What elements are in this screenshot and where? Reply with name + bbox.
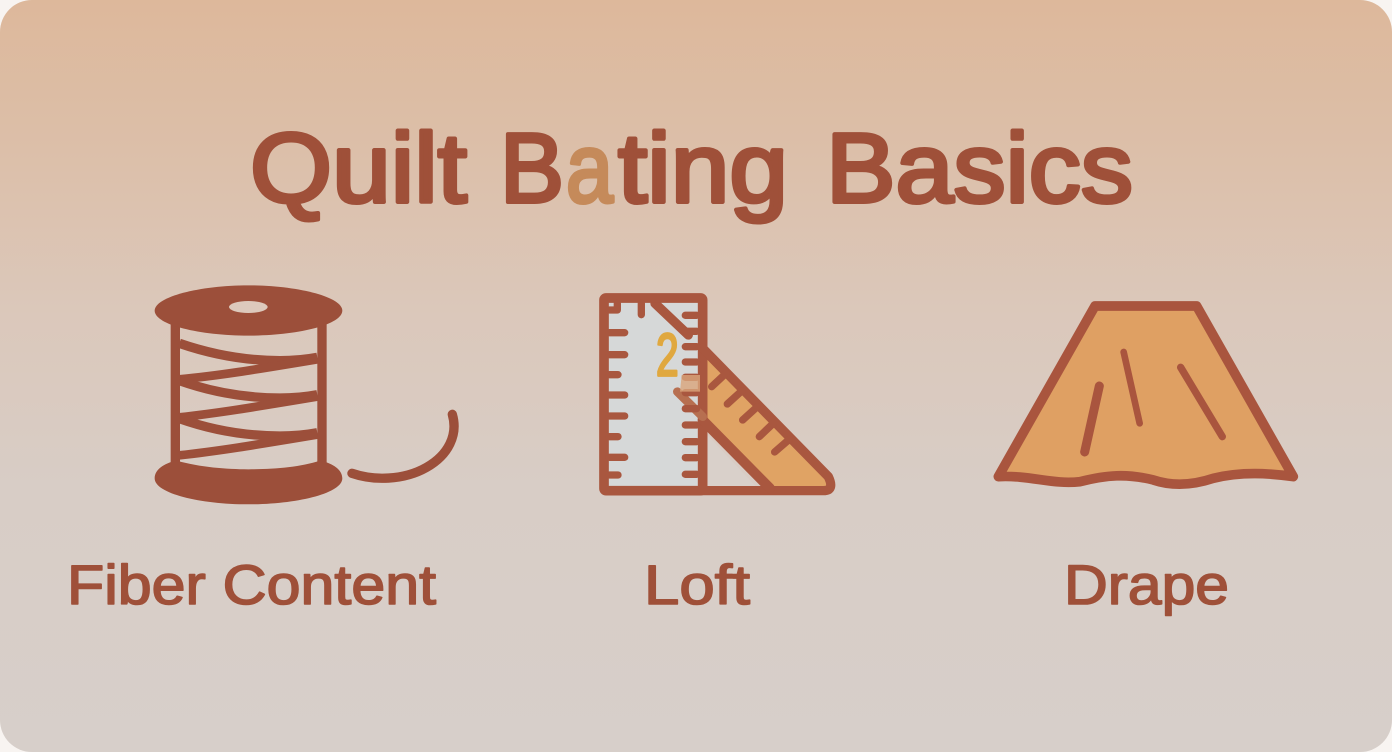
title [250, 113, 1133, 223]
numeral: 2: 2 [656, 321, 679, 388]
title: ting [618, 113, 788, 223]
label: Loft: Loft [644, 553, 751, 616]
icon: draped fabric [998, 306, 1293, 484]
title: B [500, 113, 564, 223]
icon: thread spool [155, 285, 454, 504]
title: a [566, 113, 613, 223]
title: Quilt [250, 113, 467, 223]
icon: ruler and triangle [603, 298, 831, 491]
smudge patch [680, 375, 700, 392]
title: Basics [826, 113, 1133, 223]
label: Drape: Drape [1064, 553, 1229, 616]
label: Fiber Content: Fiber Content [67, 553, 436, 616]
